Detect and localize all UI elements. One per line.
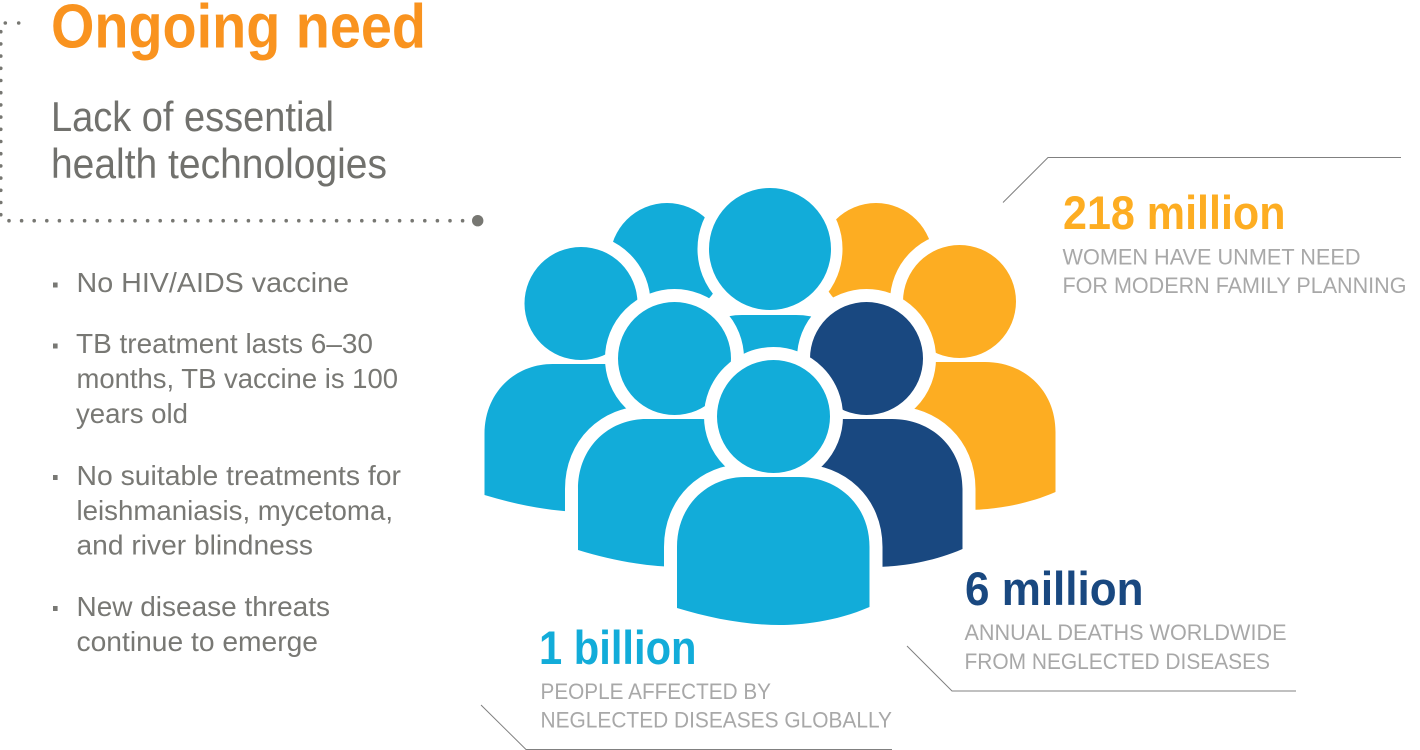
icon: crowd of people (484, 188, 1056, 625)
callout: 6 million: ANNUAL DEATHS WORLDWIDE (964, 620, 1286, 645)
person: middle right (770, 302, 962, 567)
callout: 218 million (1003, 158, 1406, 298)
bullet list: months, TB vaccine is 100 (76, 363, 398, 394)
callout: 1 billion: NEGLECTED DISEASES GLOBALLY (540, 708, 892, 733)
callout: 218 million: 218 million (1063, 186, 1286, 239)
bullet list: TB treatment lasts 6–30 (76, 328, 373, 359)
bullet list: No suitable treatments for (76, 460, 401, 491)
callout: 6 million (907, 562, 1296, 691)
person: right (863, 245, 1056, 510)
callout: 6 million: FROM NEGLECTED DISEASES (964, 649, 1270, 674)
bullet list (53, 267, 401, 657)
callout: 1 billion: 1 billion (539, 621, 696, 674)
person: left (484, 247, 677, 512)
callout: 1 billion (481, 621, 892, 750)
person: back left head (610, 203, 724, 317)
bullet list: continue to emerge (76, 626, 318, 657)
bullet list: New disease threats (76, 591, 330, 622)
bullet list: leishmaniasis, mycetoma, (76, 495, 393, 526)
subtitle: Lack of essential (51, 93, 334, 140)
person: back right head (819, 203, 933, 317)
callout: 218 million: FOR MODERN FAMILY PLANNING (1062, 273, 1406, 298)
bullet list: No HIV/AIDS vaccine (76, 267, 349, 298)
dotted bracket connector (1, 23, 483, 226)
person: top centre (674, 188, 866, 463)
subtitle: health technologies (51, 140, 387, 187)
subtitle (51, 93, 387, 187)
person: front (677, 360, 870, 625)
callout: 1 billion: PEOPLE AFFECTED BY (540, 679, 771, 704)
bullet list: and river blindness (76, 530, 313, 560)
person: middle left (578, 302, 770, 567)
callout: 218 million: WOMEN HAVE UNMET NEED (1062, 244, 1360, 270)
bullet list: years old (76, 398, 188, 429)
callout: 6 million: 6 million (965, 562, 1144, 615)
